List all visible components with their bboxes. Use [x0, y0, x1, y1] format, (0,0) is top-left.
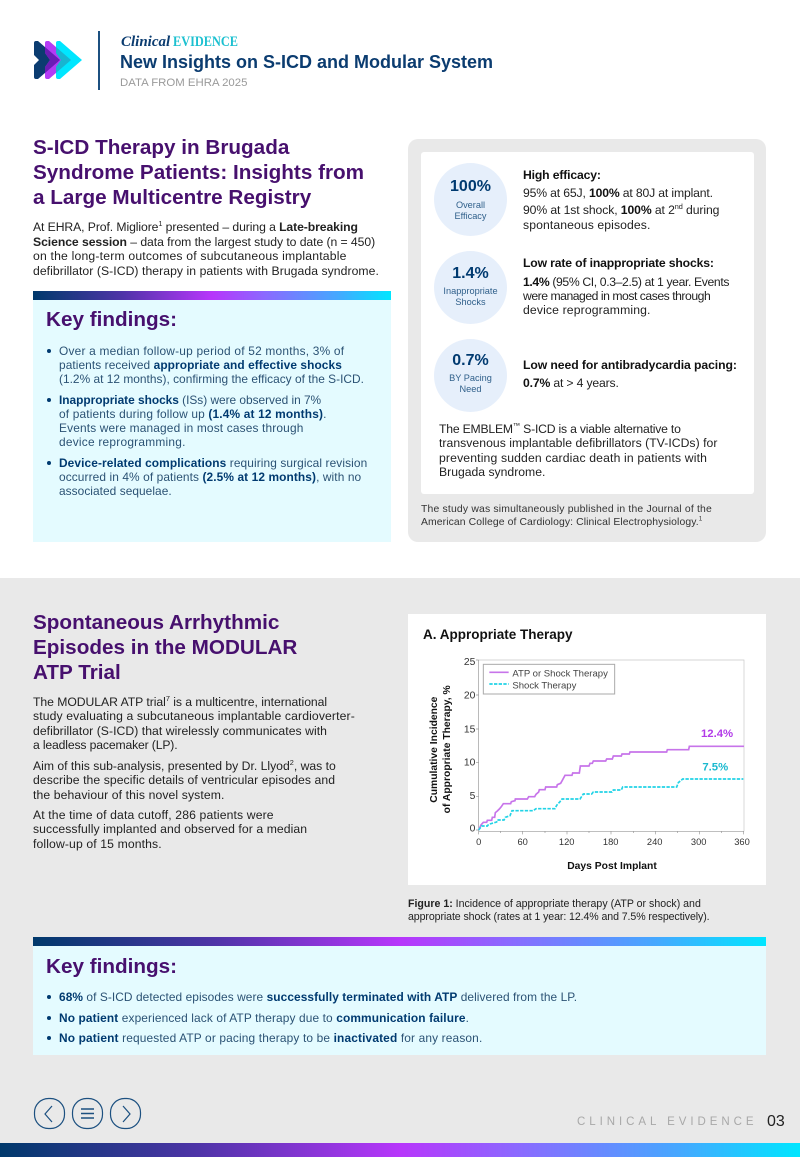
y axis tick labels: 25 — [464, 657, 476, 668]
bullet 3: occurred in 4% of patients (2.5% at 12 months), with no — [59, 470, 361, 484]
text: high efficacy: 90% at 1st shock, 100% at 2nd during — [523, 202, 719, 217]
bullet 2 — [47, 392, 327, 449]
y axis title: Cumulative Incidence — [429, 696, 440, 803]
heading: spontaneous arrhythmic episodes: Spontaneous Arrhythmic — [33, 611, 279, 634]
heading: S-ICD therapy in Brugada: S-ICD Therapy in Brugada — [33, 136, 289, 159]
plot frame — [479, 660, 744, 831]
heading: spontaneous arrhythmic episodes — [33, 611, 297, 684]
text block: trial description: study evaluating a subcutaneous implantable cardioverter- — [33, 709, 355, 723]
text: EMBLEM conclusion — [439, 421, 718, 479]
text: low inappropriate shocks — [523, 256, 729, 317]
text: EMBLEM conclusion: Brugada syndrome. — [439, 465, 545, 479]
bullet 2: device reprogramming. — [59, 435, 186, 449]
panel: key findings, MODULAR ATP — [33, 937, 766, 1055]
text: high efficacy: High efficacy: — [523, 168, 601, 182]
x axis tick labels — [476, 837, 750, 847]
x axis tick labels: 180 — [603, 837, 618, 847]
bullet 2: Events were managed in most cases through — [59, 421, 304, 435]
bullet 3 — [47, 456, 367, 498]
heading: S-ICD therapy in Brugada: a Large Multicentre Registry — [33, 186, 311, 209]
value label: 12.4%: 12.4% — [701, 728, 733, 740]
logo: three chevrons — [34, 41, 82, 79]
text: high efficacy — [523, 168, 719, 232]
figure caption: appropriate shock (rates at 1 year: 12.4% and 7.5% respectively). — [408, 911, 710, 923]
value label: 7.5%: 7.5% — [702, 762, 728, 774]
stat: inappropriate shocks: Inappropriate — [443, 286, 498, 296]
bullet 2: Inappropriate shocks (ISs) were observed in 7% — [59, 392, 321, 406]
panel: key findings, Brugada — [33, 291, 391, 542]
bullet 1: (1.2% at 12 months), confirming the efficacy of the S-ICD. — [59, 372, 364, 386]
text: high efficacy: spontaneous episodes. — [523, 218, 650, 232]
legend: ATP or Shock Therapy — [512, 668, 608, 679]
header: clinical evidence wordmark — [121, 34, 238, 50]
legend: Shock Therapy — [512, 680, 577, 691]
text: low inappropriate shocks: Low rate of inappropriate shocks: — [523, 256, 714, 270]
text: low pacing need — [523, 358, 737, 390]
text block: aim: the behaviour of this novel system. — [33, 788, 225, 802]
key findings heading: Key findings: — [46, 308, 177, 331]
gradient bar — [33, 937, 766, 946]
heading: S-ICD therapy in Brugada: Syndrome Patients: Insights from — [33, 161, 364, 184]
text: EMBLEM conclusion: The EMBLEM™ S-ICD is a viable alternative to — [439, 421, 681, 436]
text block: trial description: The MODULAR ATP trial7 is a multicentre, international — [33, 694, 327, 709]
x axis title: Days Post Implant — [567, 861, 657, 872]
text: publication note: American College of Cardiology: Clinical Electrophysiology.1 — [421, 515, 702, 528]
key findings heading: Key findings: — [46, 955, 177, 978]
text block: aim — [33, 758, 336, 802]
bullet 3: No patient requested ATP or pacing therapy to be inactivated for any reason. — [59, 1031, 482, 1045]
lower section background — [0, 578, 800, 1143]
stat: overall efficacy: 100% — [450, 178, 491, 195]
footer label: CLINICAL EVIDENCE — [577, 1116, 757, 1128]
legend — [489, 668, 608, 691]
header divider — [98, 31, 100, 90]
y axis tick labels: 0 — [470, 823, 476, 834]
heading: spontaneous arrhythmic episodes: Episodes in the MODULAR — [33, 636, 297, 659]
text block: trial description: defibrillator (S-ICD) that wirelessly communicates with — [33, 724, 327, 738]
text block: trial description — [33, 694, 355, 752]
y axis tick labels: 10 — [464, 757, 476, 768]
text block: cutoff — [33, 808, 307, 851]
header: subtitle: DATA FROM EHRA 2025 — [120, 77, 247, 89]
icon: previous — [34, 1098, 64, 1128]
x axis tick labels: 120 — [559, 837, 574, 847]
x axis tick labels: 60 — [517, 837, 528, 847]
text block: trial description: a leadless pacemaker (LP). — [33, 738, 177, 752]
gradient bar — [33, 291, 391, 300]
navigation buttons — [34, 1098, 142, 1130]
text: low inappropriate shocks: 1.4% (95% CI, 0.3–2.5) at 1 year. Events — [523, 275, 729, 289]
curve: ATP or shock therapy — [479, 746, 744, 830]
stat: overall efficacy — [434, 163, 507, 236]
text: low inappropriate shocks: were managed in most cases through — [523, 289, 710, 303]
y axis tick labels — [464, 657, 476, 834]
text block: aim: Aim of this sub-analysis, presented by Dr. Llyod2, was to — [33, 758, 336, 773]
x axis tick labels: 0 — [476, 837, 481, 847]
stat: inappropriate shocks: 1.4% — [452, 265, 489, 282]
chart heading: A. Appropriate Therapy — [423, 627, 573, 642]
text: publication note: The study was simultaneously published in the Journal of the — [421, 504, 712, 515]
bullet 2: No patient experienced lack of ATP therapy due to communication failure. — [59, 1011, 469, 1025]
bullet 1: Over a median follow-up period of 52 months, 3% of — [59, 344, 344, 358]
y axis tick labels: 20 — [464, 691, 476, 702]
bullet 1: 68% of S-ICD detected episodes were successfully terminated with ATP delivered from the LP. — [59, 990, 577, 1004]
stat: BY pacing need: 0.7% — [452, 352, 489, 369]
heading: spontaneous arrhythmic episodes: ATP Trial — [33, 661, 121, 684]
text block: introduction: on the long-term outcomes of subcutaneous implantable — [33, 249, 347, 263]
stat: overall efficacy: Efficacy — [454, 211, 486, 221]
icon: menu — [72, 1098, 102, 1128]
stat: inappropriate shocks: Shocks — [455, 297, 486, 307]
line chart: cumulative incidence — [429, 657, 750, 872]
text block: cutoff: successfully implanted and observed for a median — [33, 822, 307, 836]
bullet 3: associated sequelae. — [59, 484, 172, 498]
x axis tick labels: 240 — [647, 837, 662, 847]
icon: next — [110, 1098, 140, 1128]
bullet 3: Device-related complications requiring surgical revision — [59, 456, 367, 470]
header: title: New Insights on S-ICD and Modular System — [120, 52, 493, 72]
bullet 2: of patients during follow up (1.4% at 12 months). — [59, 407, 327, 421]
x axis tick labels: 360 — [734, 837, 750, 847]
text block: introduction: Science session – data from the largest study to date (n = 450) — [33, 234, 375, 248]
axis ticks — [476, 660, 744, 834]
header: clinical evidence wordmark: EVIDENCE — [173, 34, 238, 50]
text block: introduction — [33, 219, 379, 278]
y axis tick labels: 15 — [464, 724, 476, 735]
footer gradient bar — [0, 1143, 800, 1157]
text block: cutoff: At the time of data cutoff, 286 patients were — [33, 808, 274, 822]
text: EMBLEM conclusion: preventing sudden cardiac death in patients with — [439, 451, 707, 465]
text block: aim: describe the specific details of ventricular episodes and — [33, 773, 335, 787]
stat: BY pacing need — [434, 339, 507, 412]
text: publication note — [421, 504, 712, 528]
bullet 1: patients received appropriate and effective shocks — [59, 358, 342, 372]
y axis tick labels: 5 — [470, 791, 476, 802]
text block: introduction: defibrillator (S-ICD) therapy in patients with Brugada syndrome. — [33, 264, 379, 278]
heading: S-ICD therapy in Brugada — [33, 136, 364, 209]
bullet 1 — [47, 344, 364, 386]
text: high efficacy: 95% at 65J, 100% at 80J at implant. — [523, 186, 713, 200]
figure caption: Figure 1: Incidence of appropriate therapy (ATP or shock) and — [408, 898, 701, 910]
panel: results — [408, 139, 766, 542]
y axis title — [429, 685, 453, 813]
curve: shock therapy — [479, 779, 743, 830]
stat: inappropriate shocks — [434, 251, 507, 324]
stat: BY pacing need: BY Pacing — [449, 373, 492, 383]
text block: cutoff: follow-up of 15 months. — [33, 837, 162, 851]
text block: introduction: At EHRA, Prof. Migliore1 presented – during a Late-breaking — [33, 219, 358, 234]
x axis tick labels: 300 — [691, 837, 706, 847]
page number: 03 — [767, 1113, 785, 1130]
stat: overall efficacy: Overall — [456, 200, 485, 210]
stat: BY pacing need: Need — [460, 384, 481, 394]
y axis title: of Appropriate Therapy, % — [442, 685, 453, 813]
figure caption — [408, 898, 710, 923]
header: clinical evidence wordmark: Clinical — [121, 34, 170, 50]
text: low pacing need: Low need for antibradycardia pacing: — [523, 358, 737, 372]
text: EMBLEM conclusion: transvenous implantable defibrillators (TV-ICDs) for — [439, 436, 717, 450]
white results card — [421, 152, 754, 494]
text: low inappropriate shocks: device reprogramming. — [523, 303, 651, 317]
panel: chart card — [408, 614, 766, 885]
text: low pacing need: 0.7% at > 4 years. — [523, 376, 619, 390]
